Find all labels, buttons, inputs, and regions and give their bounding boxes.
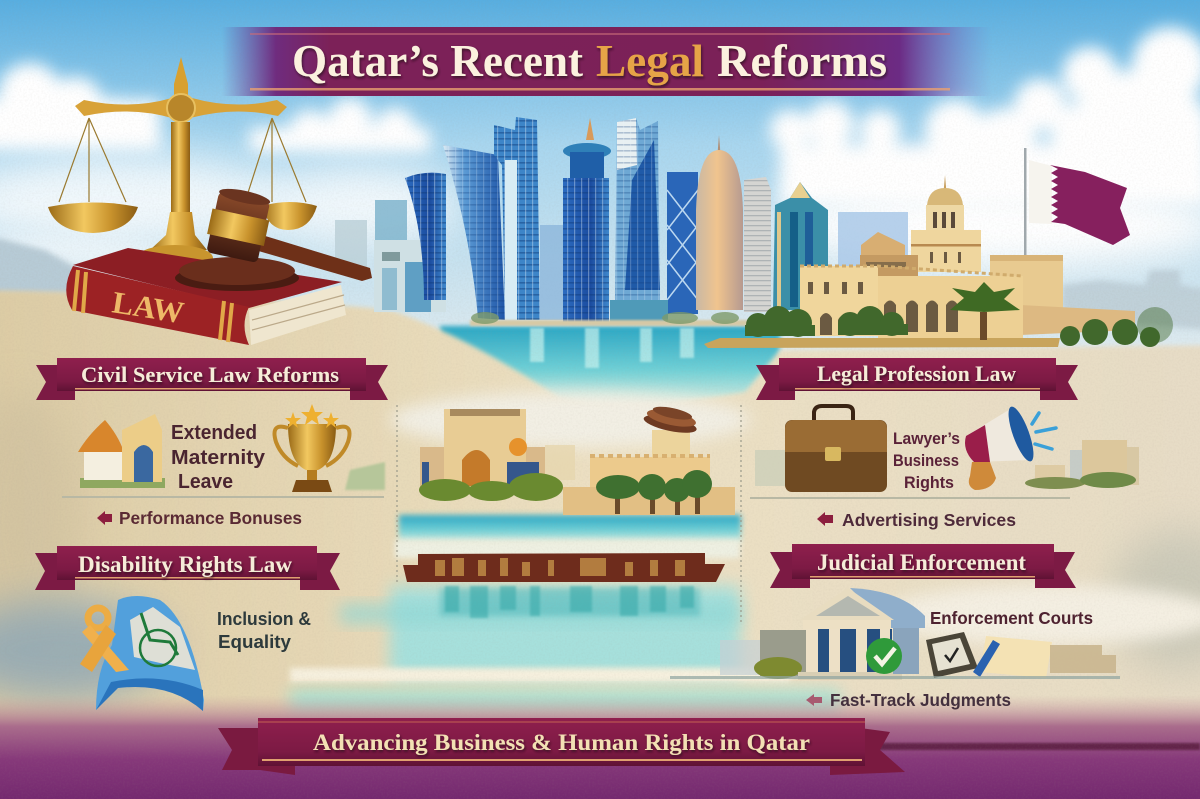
background: parchment washes: [0, 390, 1200, 700]
sail tower: [443, 145, 505, 320]
mid hall: [860, 232, 918, 280]
beam: [75, 98, 287, 118]
background: central water bands: [290, 515, 840, 712]
label: lawyer's business rights: Business: [893, 451, 959, 470]
title text: Reforms: [717, 36, 887, 86]
base: [137, 245, 213, 271]
icon: house: [78, 414, 165, 488]
window rows: [808, 282, 958, 335]
scales of justice: [48, 57, 317, 271]
lattice tower: [667, 172, 698, 314]
bullet tower: [696, 135, 743, 310]
label: extended maternity leave: Leave: [178, 471, 233, 493]
book label: LAW: [110, 284, 186, 330]
icon: courthouse: [798, 588, 925, 680]
ribbon: disability rights law: [35, 546, 340, 590]
footer ribbon: [218, 718, 905, 775]
icon: briefcase: [785, 406, 887, 492]
low podium: [374, 240, 446, 312]
right pan: [262, 202, 317, 230]
right block: [990, 255, 1063, 320]
footer text: Advancing Business & Human Rights in Qatar: [313, 730, 810, 755]
panel: central buildings: [403, 403, 735, 618]
side buildings right: [1050, 645, 1116, 673]
ribbon: judicial enforcement: Judicial Enforcement: [817, 550, 1026, 575]
dotted dividers: [397, 405, 741, 625]
upper tower: [911, 175, 981, 272]
pivot: [167, 94, 195, 122]
bushes: [419, 473, 563, 501]
head: [203, 185, 274, 264]
disc tower: [563, 118, 611, 322]
reflection: [445, 586, 694, 618]
law book: [66, 248, 346, 345]
flagpole: [1024, 148, 1026, 258]
pale slab tower: [744, 177, 771, 312]
gold bands: [74, 270, 232, 342]
pale distant blocks: [545, 445, 575, 480]
cover: [73, 248, 342, 308]
label: lawyer's business rights: Rights: [904, 473, 954, 492]
faceted tower: [615, 118, 660, 310]
background buildings left: [755, 450, 785, 486]
left chains: [59, 118, 126, 202]
right fort: [563, 403, 735, 515]
twisted tower: [405, 173, 446, 300]
bushes: [745, 306, 1173, 347]
teal and gold tower: [773, 182, 828, 310]
title text: [292, 36, 887, 86]
background: central bay water: [440, 326, 780, 406]
distant greenery: [345, 462, 385, 490]
background: sand and parchment: [0, 290, 1200, 799]
icon: pen: [973, 640, 1000, 677]
label: inclusion and equality: [217, 609, 311, 652]
skyline: [335, 117, 908, 326]
podium: [610, 300, 668, 324]
left pan: [48, 202, 138, 233]
background buildings right: [1025, 440, 1139, 489]
post: [171, 122, 190, 212]
right chains: [245, 118, 306, 202]
label: enforcement courts: Enforcement Courts: [930, 608, 1093, 628]
title text: Legal: [596, 36, 704, 86]
label: lawyer's business rights: Lawyer’s: [893, 429, 960, 448]
sound block: [175, 265, 299, 291]
main blocks: [800, 266, 878, 336]
panel: civil service icons: [62, 404, 385, 498]
label: lawyer's business rights: [893, 429, 960, 492]
gavel: [175, 185, 372, 291]
background: clouds: [0, 27, 1200, 284]
background: sky: [0, 0, 1200, 360]
bush: [754, 657, 802, 679]
bullet: advertising services: Advertising Services: [842, 510, 1016, 530]
icon: check badge: [866, 638, 902, 674]
side building: [720, 630, 810, 676]
bullet: performance bonuses: Performance Bonuses: [119, 508, 302, 528]
icon: disability badge: [80, 596, 204, 711]
ribbon: legal profession law: Legal Profession Law: [817, 361, 1016, 386]
spire: [174, 57, 188, 96]
label: extended maternity leave: [171, 422, 266, 493]
palm: [950, 282, 1020, 340]
shoreline with trees: [470, 312, 760, 326]
battlements: [800, 266, 1023, 276]
low wall: [1020, 305, 1135, 335]
title text: Qatar’s Recent: [292, 36, 583, 86]
flag of Qatar: [1029, 160, 1130, 245]
handle: [255, 235, 372, 281]
distant towers: [335, 200, 908, 320]
ribbon: legal profession law: [756, 358, 1078, 400]
icon: megaphone: [965, 404, 1056, 490]
label: extended maternity leave: Maternity: [171, 447, 266, 469]
long brown facade: [403, 553, 725, 582]
icon: clipboard: [926, 632, 978, 678]
ribbon: disability rights law: Disability Rights Law: [78, 552, 292, 577]
pages: [249, 285, 346, 345]
background: purple base wash: [0, 695, 1200, 799]
palms: [596, 470, 712, 515]
panel: judicial enforcement icons: [670, 588, 1120, 680]
label: inclusion and equality: Inclusion &: [217, 609, 311, 629]
icon: trophy: [274, 404, 350, 492]
panel: legal profession icons: [750, 404, 1139, 499]
ribbon: judicial enforcement: [770, 544, 1076, 588]
title banner: [222, 27, 992, 96]
spine: [66, 266, 249, 345]
ground line: [670, 676, 1120, 679]
label: extended maternity leave: Extended: [171, 422, 257, 444]
ribbon: civil service law reforms: Civil Service Law Reforms: [81, 362, 339, 387]
label: inclusion and equality: Equality: [218, 632, 291, 652]
icon: awareness ribbon: [80, 608, 129, 672]
bullet: fast-track judgments: Fast-Track Judgments: [830, 690, 1011, 710]
icon: paper: [980, 636, 1052, 678]
palace: [704, 148, 1173, 348]
ribbon: civil service law reforms: [36, 358, 388, 400]
left civic building: [420, 409, 545, 489]
background: far hills: [0, 236, 1200, 330]
island strip: [704, 338, 1060, 348]
icon: sound rays: [1032, 413, 1056, 449]
tall blue tower: [494, 117, 540, 320]
icon: stars: [285, 404, 339, 428]
